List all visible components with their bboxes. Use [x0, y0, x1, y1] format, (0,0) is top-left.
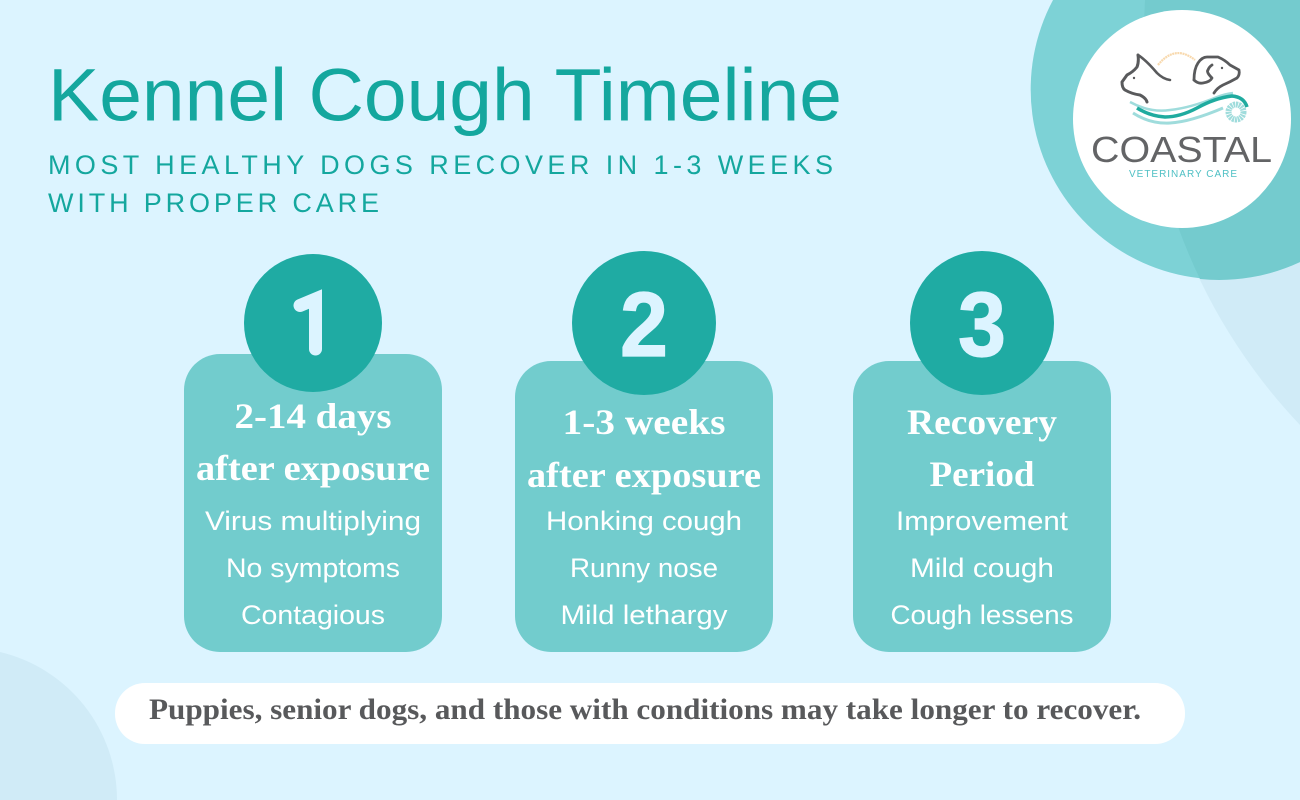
- background circles: upper right: [1031, 0, 1300, 425]
- stage 2 heading: 1-3 weeks: [562, 402, 726, 442]
- callout note: [115, 683, 1185, 744]
- stage 1 number badge: [244, 254, 382, 392]
- icon: cat outline: [1122, 55, 1170, 102]
- stage 1 heading: after exposure: [196, 448, 430, 488]
- stage 3 heading: [907, 402, 1057, 494]
- logo wordmark: COASTAL: [1091, 129, 1272, 170]
- stage 3 number badge: [910, 251, 1054, 395]
- background circle: lower left: [0, 652, 117, 800]
- stage 2 list: Mild lethargy: [560, 600, 728, 630]
- icon: dog outline: [1194, 57, 1239, 93]
- stage 2 number badge: [572, 251, 716, 395]
- stage 3 list: Improvement: [896, 506, 1069, 536]
- subtitle: WITH PROPER CARE: [48, 188, 379, 218]
- subtitle: MOST HEALTHY DOGS RECOVER IN 1-3 WEEKS: [48, 150, 833, 180]
- stage 1 list: No symptoms: [226, 553, 400, 583]
- stage 1 heading: [196, 396, 430, 488]
- panel: stage 2: [515, 251, 773, 652]
- stage 1 list: Virus multiplying: [205, 506, 421, 536]
- stage 3 heading: Period: [930, 454, 1034, 494]
- stage 1 list: [205, 506, 421, 630]
- stage 2 list: Honking cough: [546, 506, 742, 536]
- title: Kennel Cough Timeline: [48, 54, 842, 136]
- callout note: Puppies, senior dogs, and those with conditions may take longer to recover.: [149, 693, 1141, 726]
- stage 2 number badge: 2: [620, 274, 668, 376]
- icon: waves: [1130, 93, 1247, 123]
- panel: stage 3: [853, 251, 1111, 652]
- stage 2 list: Runny nose: [570, 553, 718, 583]
- stage 3 list: Cough lessens: [890, 600, 1074, 630]
- stage 1 list: Contagious: [241, 600, 385, 630]
- logo: [1073, 10, 1291, 228]
- stage 3 number badge: 3: [958, 274, 1006, 376]
- stage 3 heading: Recovery: [907, 402, 1057, 442]
- stage 2 heading: after exposure: [527, 455, 761, 495]
- stage 1 heading: 2-14 days: [234, 396, 392, 436]
- stage 3 list: [890, 506, 1074, 630]
- stage 2 list: [546, 506, 742, 630]
- panel: stage 1: [184, 254, 442, 652]
- stage 3 list: Mild cough: [910, 553, 1054, 583]
- logo tagline: VETERINARY CARE: [1129, 169, 1237, 180]
- stage 2 heading: [527, 402, 761, 495]
- subtitle: [48, 150, 833, 218]
- icon: sun arc: [1158, 53, 1195, 65]
